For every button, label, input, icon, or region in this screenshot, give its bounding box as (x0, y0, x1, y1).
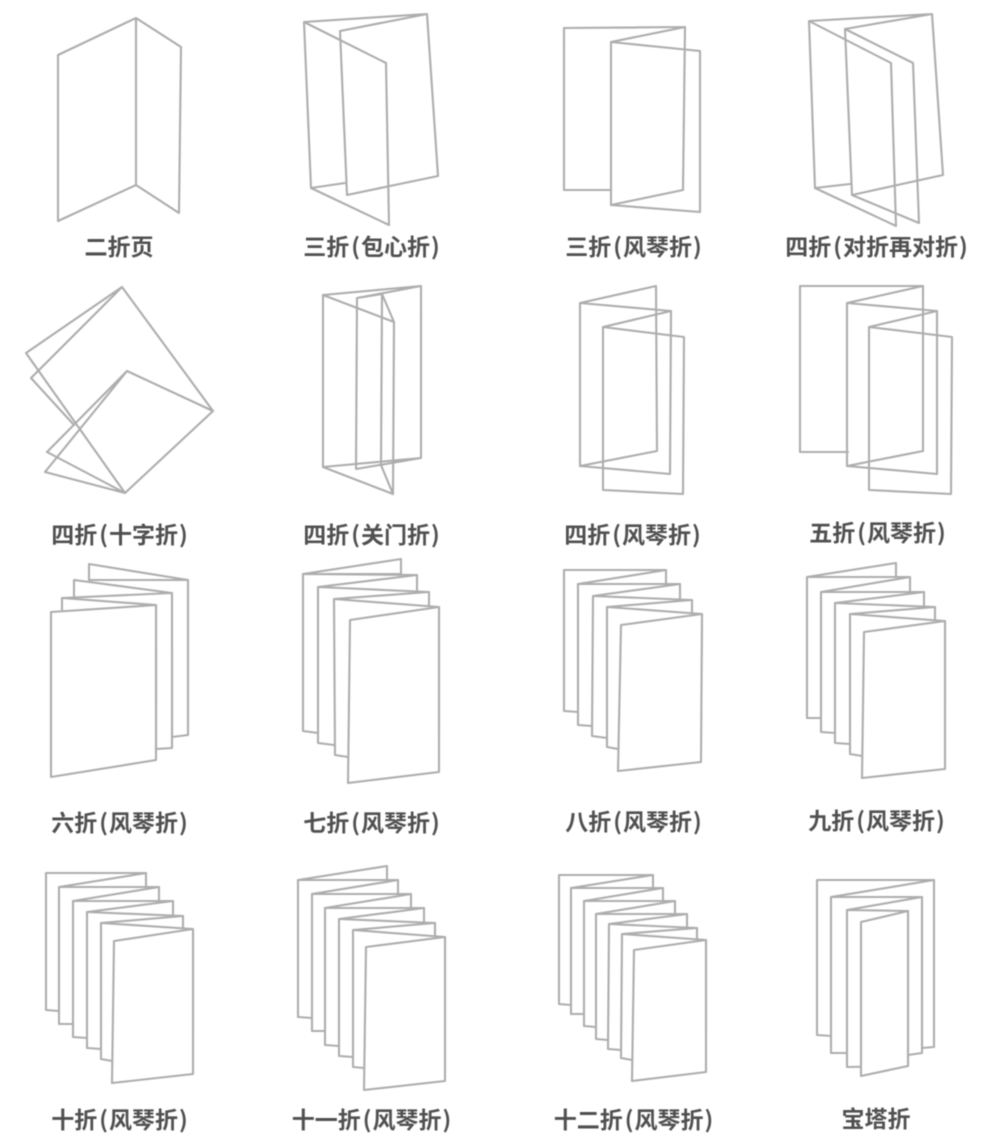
icon: pagoda fold (817, 880, 934, 1076)
label: 九折(风琴折): 九折(风琴折) (808, 802, 946, 836)
icon: accordion three fold (564, 27, 700, 212)
label: 三折(包心折): 三折(包心折) (303, 228, 441, 262)
panel: 九折风琴折 (807, 563, 946, 836)
icon: accordion four fold (580, 286, 684, 494)
icon: accordion five fold (800, 286, 952, 494)
icon: accordion nine fold (807, 563, 945, 778)
label: 十折(风琴折): 十折(风琴折) (51, 1101, 189, 1135)
panel: 十一折风琴折 (292, 866, 452, 1135)
panel: 二折页 (58, 18, 181, 260)
label: 十二折(风琴折): 十二折(风琴折) (554, 1101, 714, 1135)
panel: 四折风琴折 (564, 286, 702, 550)
label: 宝塔折: 宝塔折 (842, 1106, 910, 1132)
icon: accordion six fold (51, 564, 188, 777)
icon: letter fold (304, 14, 438, 225)
label: 五折(风琴折): 五折(风琴折) (809, 514, 947, 548)
panel: 七折风琴折 (303, 559, 441, 838)
label: 四折(十字折): 四折(十字折) (51, 516, 189, 550)
icon: cross fold (26, 287, 213, 493)
label: 四折(对折再对折): 四折(对折再对折) (785, 228, 969, 262)
label: 四折(风琴折): 四折(风琴折) (564, 516, 702, 550)
icon: accordion seven fold (303, 559, 439, 783)
icon: accordion twelve fold (559, 875, 706, 1081)
icon: accordion eleven fold (298, 866, 445, 1090)
panel: 三折包心折 (303, 14, 441, 262)
panel: 十折风琴折 (46, 873, 193, 1135)
icon: double parallel fold (809, 14, 943, 226)
panel: 四折十字折 (26, 287, 213, 550)
icon: accordion ten fold (46, 873, 193, 1083)
panel: 六折风琴折 (51, 564, 189, 838)
icon: gate fold (323, 286, 421, 494)
icon: two-panel fold (58, 18, 181, 221)
label: 四折(关门折): 四折(关门折) (303, 516, 441, 550)
icon: accordion eight fold (564, 570, 702, 771)
label: 六折(风琴折): 六折(风琴折) (51, 804, 189, 838)
label: 十一折(风琴折): 十一折(风琴折) (292, 1101, 452, 1135)
panel: 十二折风琴折 (554, 875, 714, 1135)
panel: 四折关门折 (303, 286, 441, 550)
label: 八折(风琴折): 八折(风琴折) (565, 803, 703, 837)
label: 二折页: 二折页 (84, 234, 154, 260)
panel: 八折风琴折 (564, 570, 703, 837)
label: 七折(风琴折): 七折(风琴折) (303, 804, 441, 838)
panel: 宝塔折 (817, 880, 934, 1132)
panel: 三折风琴折 (564, 27, 703, 262)
label: 三折(风琴折): 三折(风琴折) (565, 228, 703, 262)
panel: 四折对折再对折 (785, 14, 969, 262)
panel: 五折风琴折 (800, 286, 952, 548)
